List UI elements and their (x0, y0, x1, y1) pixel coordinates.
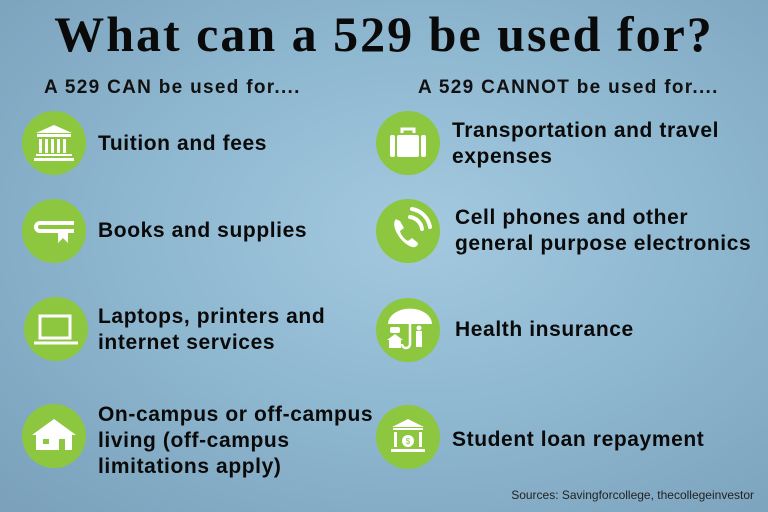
text: laptops: Laptops, printers and (98, 305, 325, 328)
text: tuition: Tuition and fees (98, 132, 267, 155)
icon: house (22, 404, 86, 468)
heading: cannot: A 529 CANNOT be used for.... (418, 77, 719, 98)
text: living: living (off-campus (98, 429, 290, 452)
sources: Sources: Savingforcollege, thecollegeinvestor (511, 488, 754, 502)
text: health: Health insurance (455, 318, 634, 341)
text: living (98, 403, 373, 478)
text: books: Books and supplies (98, 219, 307, 242)
text: laptops (98, 305, 325, 354)
icon: suitcase (376, 111, 440, 175)
text: living: limitations apply) (98, 455, 282, 478)
text: living: On-campus or off-campus (98, 403, 373, 426)
icon: bank: $ (406, 437, 411, 446)
heading: can: A 529 CAN be used for.... (44, 77, 301, 98)
icon: bank (376, 405, 440, 469)
text: phones (455, 206, 751, 255)
icon: building (22, 111, 86, 175)
text: transport: Transportation and travel (452, 119, 719, 142)
text: transport: expenses (452, 145, 553, 168)
text: loan: Student loan repayment (452, 428, 704, 451)
title: What can a 529 be used for? (54, 6, 714, 62)
icon: laptop (24, 297, 88, 361)
icon: phone (376, 199, 440, 263)
text: laptops: internet services (98, 331, 275, 354)
icon: book (22, 199, 86, 263)
text: phones: general purpose electronics (455, 232, 751, 255)
text: transport (452, 119, 719, 168)
icon: insurance (376, 298, 440, 362)
text: phones: Cell phones and other (455, 206, 688, 229)
